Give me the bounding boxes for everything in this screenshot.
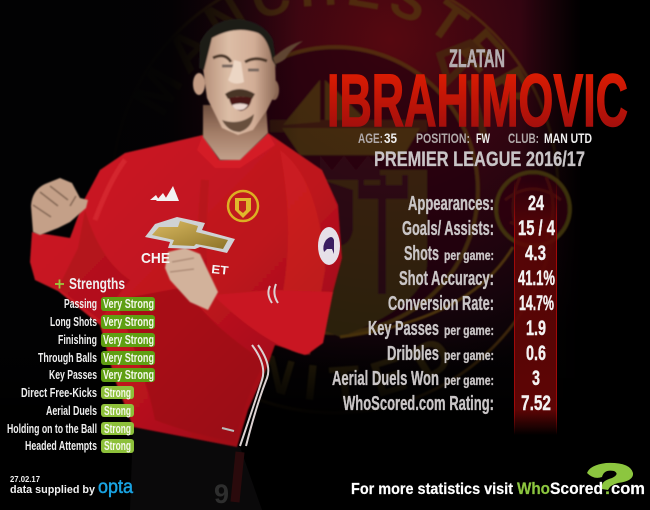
stat values: 14.7% xyxy=(519,292,554,315)
stat labels xyxy=(332,193,494,415)
strength labels: Direct Free-Kicks xyxy=(21,385,97,400)
stat labels: WhoScored.com Rating: xyxy=(343,393,494,415)
competition heading: PREMIER LEAGUE 2016/17 xyxy=(374,148,585,171)
adidas logo xyxy=(150,186,179,201)
hem mark xyxy=(222,428,234,431)
club badge on shirt xyxy=(228,191,258,221)
strength labels: Aerial Duels xyxy=(46,403,97,418)
rating pill text: Very Strong xyxy=(103,332,154,347)
rating pill text: Very Strong xyxy=(103,314,154,329)
stat labels: Dribbles xyxy=(387,343,439,365)
player details: MAN UTD xyxy=(544,130,592,146)
strengths heading: Strengths xyxy=(69,276,125,293)
stat labels: Conversion Rate: xyxy=(388,293,494,315)
stat values: 1.9 xyxy=(526,317,546,340)
Premier League sleeve badge xyxy=(318,227,340,265)
shirt side stripes xyxy=(240,284,278,446)
strengths heading xyxy=(55,276,125,293)
player shorts xyxy=(130,427,262,510)
stat labels: per game: xyxy=(444,347,494,363)
footer call to action: For more statistics visit xyxy=(351,481,514,498)
rating pill text: Strong xyxy=(104,385,131,400)
strength labels xyxy=(7,296,97,453)
player photo illustration xyxy=(30,19,342,510)
stat values: 0.6 xyxy=(526,342,546,365)
strength labels: Holding on to the Ball xyxy=(7,421,97,436)
rating pill text: Very Strong xyxy=(103,350,154,365)
player details: 35 xyxy=(384,130,397,146)
stat labels: Goals/ Assists: xyxy=(402,218,494,240)
rating pill text: Strong xyxy=(104,421,131,436)
stat values: 41.1% xyxy=(518,267,555,290)
rating pill text: Strong xyxy=(104,403,131,418)
neck xyxy=(203,105,268,160)
sponsor bowtie xyxy=(145,217,235,253)
very strong rating pills xyxy=(101,297,155,382)
stats value column xyxy=(514,180,557,435)
rating pill text: Very Strong xyxy=(103,296,154,311)
stat labels: Aerial Duels Won xyxy=(332,368,439,390)
stat labels: Key Passes xyxy=(368,318,439,340)
strength labels: Passing xyxy=(64,296,97,311)
stat labels: per game: xyxy=(444,372,494,388)
opta logo: opta xyxy=(98,477,133,498)
stat values: 7.52 xyxy=(521,392,551,415)
WhoScored logo text: com xyxy=(611,479,645,498)
hand on chest xyxy=(165,248,218,310)
stat labels: per game: xyxy=(444,247,494,263)
rating pill text: Strong xyxy=(104,438,131,453)
strength labels: Headed Attempts xyxy=(25,438,97,453)
player details: FW xyxy=(476,130,491,146)
club crest watermark xyxy=(192,0,559,404)
WhoScored logo text: Scored xyxy=(550,479,603,498)
stat values: 24 xyxy=(528,192,544,215)
strength labels: Long Shots xyxy=(50,314,97,329)
strengths panel xyxy=(7,276,155,453)
shorts number: 9 xyxy=(214,479,229,509)
rating pill text xyxy=(103,296,154,453)
strong rating pills xyxy=(101,386,134,453)
player details: CLUB: xyxy=(508,130,539,146)
strength labels: Finishing xyxy=(58,332,97,347)
club ball crest detail xyxy=(496,172,570,246)
sponsor text end: ET xyxy=(211,262,230,278)
WhoScored logo text xyxy=(517,479,645,498)
head xyxy=(193,19,303,135)
stat values xyxy=(518,192,555,415)
player details: POSITION: xyxy=(416,130,470,146)
player details: AGE: xyxy=(358,130,383,146)
red glow behind crest xyxy=(120,0,580,430)
stat values: 4.3 xyxy=(525,242,546,265)
club crest watermark: UNITED xyxy=(261,340,448,400)
stat labels: Shot Accuracy: xyxy=(399,268,494,290)
strength labels: Through Balls xyxy=(38,350,97,365)
WhoScored logo text: Who xyxy=(517,479,550,498)
stat labels: per game: xyxy=(444,322,494,338)
first name: ZLATAN xyxy=(449,45,505,73)
sponsor text: CHE xyxy=(141,250,170,267)
date: 27.02.17 xyxy=(10,474,40,484)
stat values: 3 xyxy=(532,367,540,390)
stat labels: Appearances: xyxy=(408,193,494,215)
stat labels: Shots xyxy=(404,243,439,265)
strength labels: Key Passes xyxy=(49,367,97,382)
raised fist xyxy=(31,178,88,235)
WhoScored logo mark xyxy=(587,463,633,490)
data credit: data supplied by xyxy=(10,484,96,496)
player details xyxy=(358,130,592,146)
stat values: 15 / 4 xyxy=(518,217,555,240)
WhoScored logo text: . xyxy=(605,479,610,498)
rating pill text: Very Strong xyxy=(103,367,154,382)
player shirt xyxy=(30,133,342,447)
